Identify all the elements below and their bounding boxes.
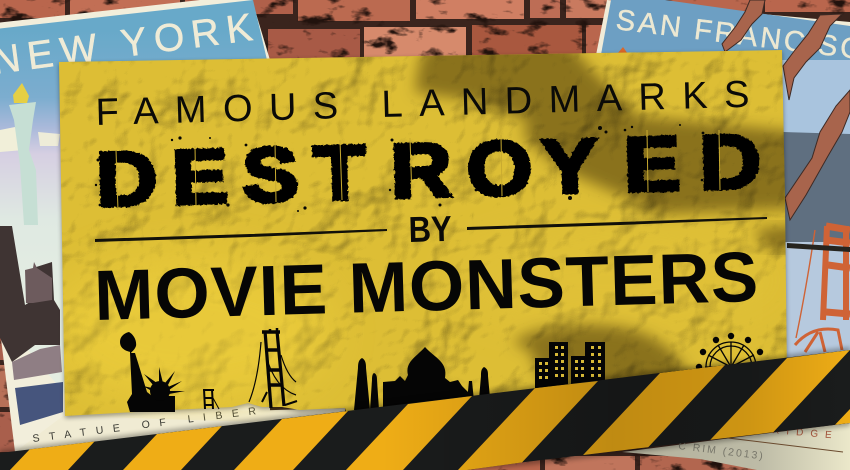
icon: city buildings silhouette xyxy=(535,342,605,390)
poster: New York xyxy=(0,0,270,452)
paper tone patches xyxy=(50,230,790,405)
icon: Golden Gate bridge silhouette xyxy=(249,328,297,408)
torn cracks showing the wall xyxy=(722,0,850,220)
heading: Famous Landmarks: FAMOUS LANDMARKS xyxy=(95,74,750,134)
grunge splatter on Destroyed xyxy=(95,124,704,212)
poster: San Francisco xyxy=(595,0,850,360)
lower right poster caption strip xyxy=(622,423,850,470)
heading: Movie Monsters: MOVIE MONSTERS xyxy=(93,238,759,336)
icon: Statue of Liberty silhouette xyxy=(120,332,185,412)
rule right of By xyxy=(467,217,767,230)
caption: Pacific Rim (2013): C RIM (2013) xyxy=(678,440,765,463)
poster lower blue panel xyxy=(15,382,63,425)
caption: Golden Gate Bridge: RIDGE xyxy=(772,425,839,442)
heading: Destroyed: DESTROYED xyxy=(95,119,762,223)
dark tear band across poster xyxy=(787,243,850,252)
icon: Golden Gate bridge on poster xyxy=(795,226,850,352)
icon: orange tip on San Francisco poster xyxy=(617,47,628,54)
icon: Statue of Liberty torch on poster xyxy=(9,83,38,225)
caption: Statue of Liberty: STATUE OF LIBER xyxy=(32,404,266,445)
icon: Ferris wheel silhouette xyxy=(696,333,763,392)
yellow paper poster xyxy=(59,50,787,427)
poster city silhouette xyxy=(0,226,62,380)
monster shadow on poster xyxy=(415,40,800,400)
stencil gaps in Destroyed xyxy=(116,130,720,210)
poster caption strip xyxy=(15,404,345,452)
heading: By: BY xyxy=(408,208,452,250)
icon: small Golden Gate bridge silhouette xyxy=(203,389,219,409)
rule left of By xyxy=(95,229,387,242)
hazard tape xyxy=(0,345,850,470)
icon: Taj Mahal silhouette xyxy=(354,347,490,410)
